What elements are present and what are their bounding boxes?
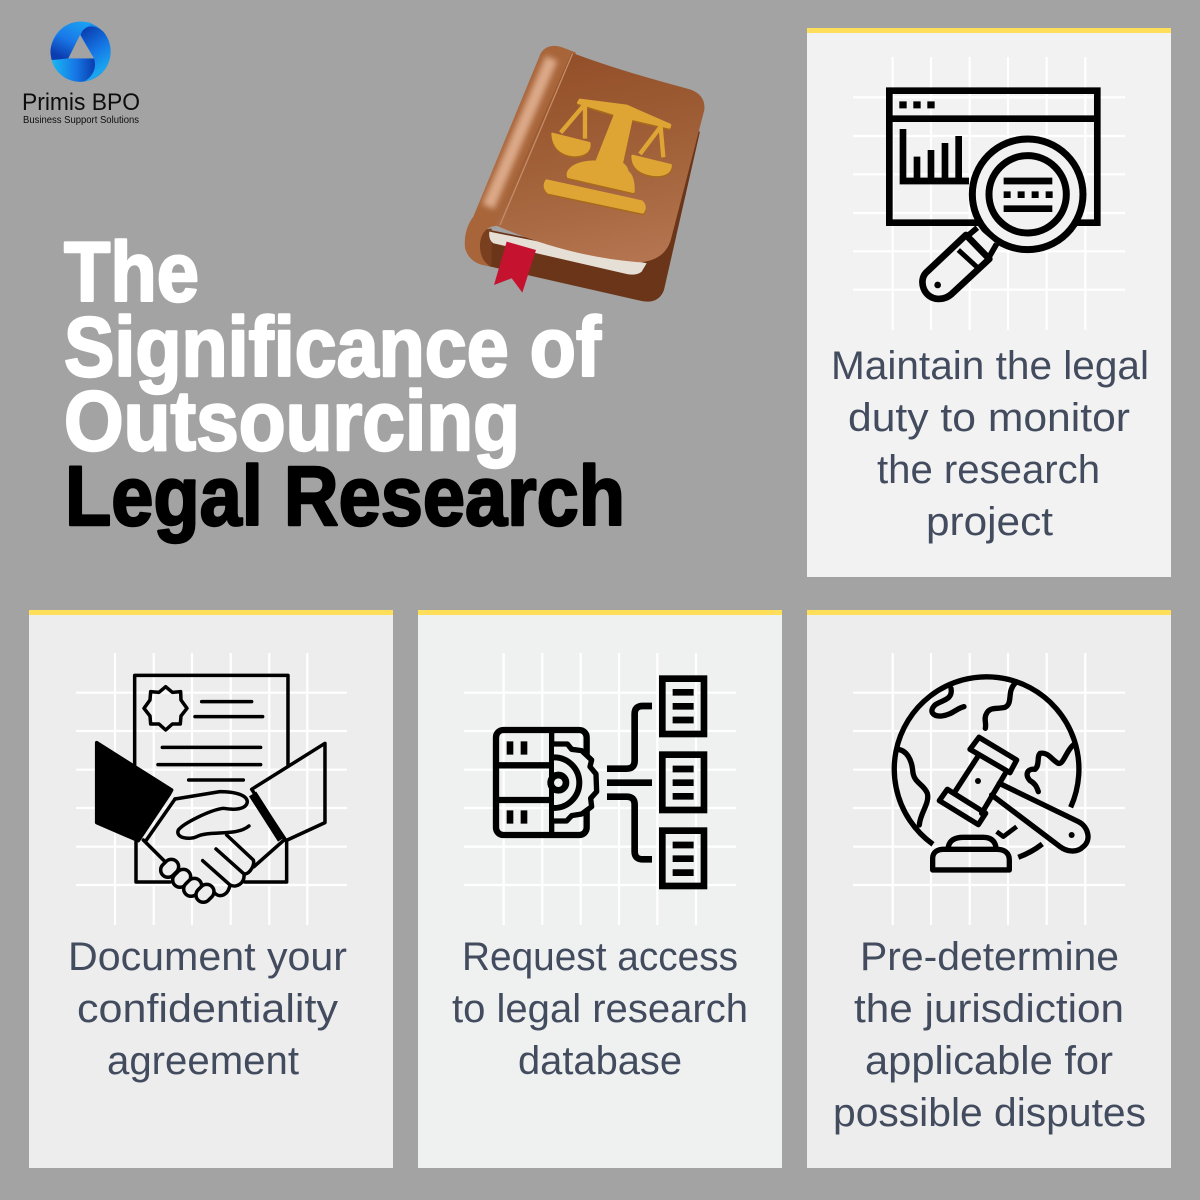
card text: the research xyxy=(877,448,1100,492)
book spine xyxy=(465,46,576,266)
card text xyxy=(831,344,1149,544)
cover crease xyxy=(500,53,573,225)
card text: duty to monitor xyxy=(848,396,1130,440)
card text: Maintain the legal xyxy=(831,344,1149,388)
yellow accent bar xyxy=(807,610,1171,615)
book pages xyxy=(489,232,647,275)
panel: monitor the research project xyxy=(807,28,1171,577)
panel background xyxy=(29,610,393,1168)
title line: Legal Research: Legal Research xyxy=(65,449,625,543)
panel: research database access xyxy=(418,610,782,1168)
illustration: law book xyxy=(465,46,704,302)
book back cover xyxy=(468,130,700,302)
card text: the jurisdiction xyxy=(854,987,1124,1031)
bookmark ribbon xyxy=(494,242,536,293)
panel background xyxy=(418,610,782,1168)
card text: Pre-determine xyxy=(860,935,1119,979)
icon: logo swirl xyxy=(51,22,111,82)
icon: gold scales xyxy=(545,100,671,214)
card text: to legal research xyxy=(452,987,748,1031)
title line: Significance of: Significance of xyxy=(64,300,602,394)
scales chains xyxy=(561,104,663,157)
icon: handshake over document xyxy=(97,675,325,905)
title line: The: The xyxy=(64,225,199,319)
yellow accent bar xyxy=(29,610,393,615)
card text: Request access xyxy=(462,935,738,979)
book front cover xyxy=(495,53,704,262)
card text: applicable for xyxy=(865,1039,1113,1083)
title xyxy=(64,225,625,543)
scales body xyxy=(545,100,671,212)
panel background xyxy=(807,610,1171,1168)
logo tagline: Business Support Solutions xyxy=(23,115,139,126)
icon: analytics window with magnifier xyxy=(889,91,1097,299)
icon: database with gear and documents xyxy=(496,679,704,886)
panel: confidentiality agreement xyxy=(29,610,393,1168)
scales shadow xyxy=(545,102,671,214)
yellow accent bar xyxy=(418,610,782,615)
panel: jurisdiction for disputes xyxy=(807,610,1171,1168)
card text: possible disputes xyxy=(833,1091,1146,1135)
card text xyxy=(452,935,748,1083)
logo name: Primis BPO xyxy=(22,89,140,116)
panel background xyxy=(807,28,1171,577)
card text: Document your xyxy=(68,935,347,979)
inner curl shadow xyxy=(477,228,492,265)
spine highlight xyxy=(488,58,552,207)
card text xyxy=(833,935,1146,1135)
card text xyxy=(68,935,347,1083)
logo: Primis BPO xyxy=(22,22,140,126)
title line: Outsourcing: Outsourcing xyxy=(64,374,520,468)
card text: project xyxy=(926,500,1053,544)
card text: confidentiality xyxy=(77,987,338,1031)
icon: globe with gavel xyxy=(894,677,1088,870)
card text: database xyxy=(518,1039,682,1083)
yellow accent bar xyxy=(807,28,1171,33)
card text: agreement xyxy=(107,1039,299,1083)
